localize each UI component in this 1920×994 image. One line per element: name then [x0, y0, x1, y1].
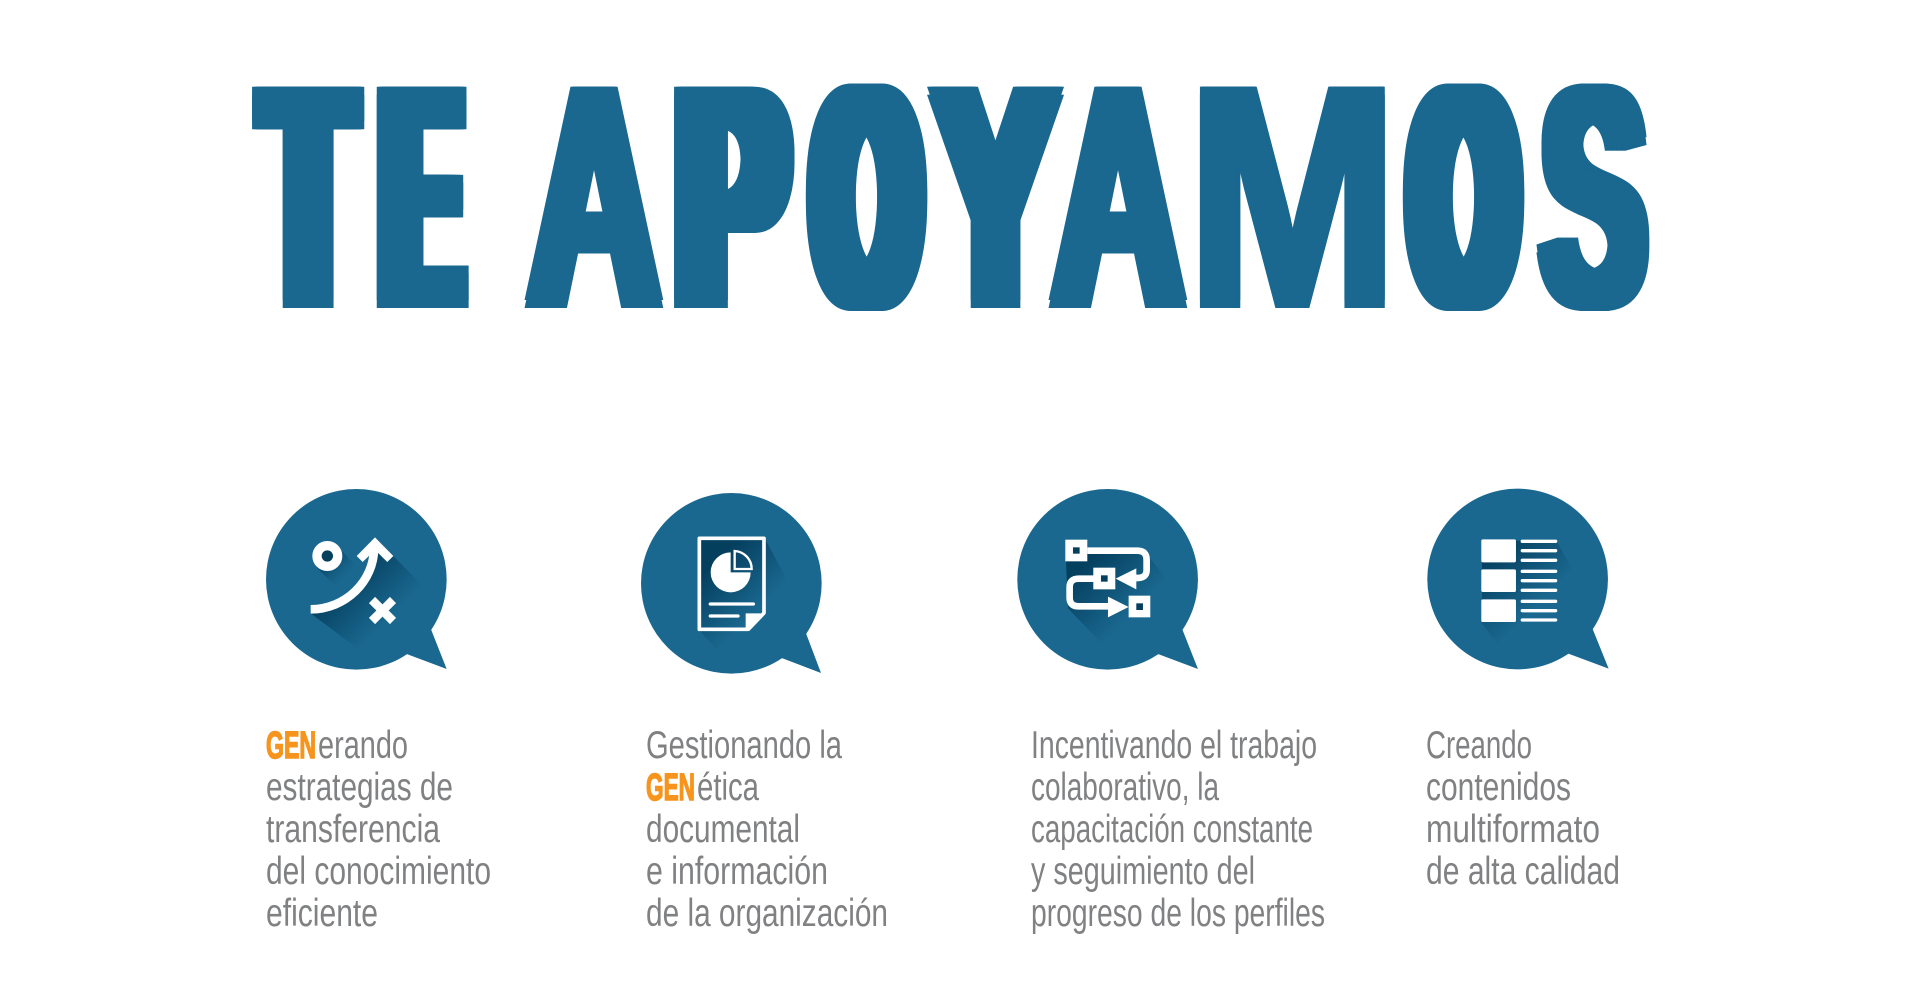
title: S [1542, 23, 1646, 370]
text block: gestionando: de la organización [646, 892, 888, 935]
text block: creando: de alta calidad [1426, 850, 1620, 893]
text block: creando: contenidos [1426, 766, 1571, 809]
icon: strategy speech bubble [266, 489, 447, 670]
text block: incentivando: y seguimiento del [1031, 850, 1255, 893]
title [252, 23, 1650, 370]
title: A [528, 23, 660, 370]
title: E [385, 23, 458, 370]
text block: generando: transferencia [266, 808, 440, 851]
text block: generando: del conocimiento [266, 850, 491, 893]
text block: generando: eficiente [266, 892, 378, 935]
text block: gestionando [646, 724, 888, 935]
text block: generando: estrategias de [266, 766, 453, 809]
title: Y [936, 23, 1055, 370]
icon: document speech bubble [641, 493, 822, 674]
text block: gestionando: ética [697, 766, 759, 809]
text block: gestionando: e información [646, 850, 828, 893]
title: O [1413, 23, 1514, 370]
text block: incentivando: progreso de los perfiles [1031, 892, 1325, 935]
text block: creando [1426, 724, 1620, 893]
text block: gestionando: Gestionando la [646, 724, 842, 767]
text block: generando: GEN [266, 725, 316, 767]
title: A [1052, 23, 1184, 370]
text block: incentivando [1031, 724, 1325, 935]
text block: gestionando: GEN [646, 767, 695, 809]
text block: generando [266, 724, 491, 935]
title: T [266, 23, 350, 370]
text block: generando: erando [318, 724, 408, 767]
text block: incentivando: colaborativo, la [1031, 766, 1219, 809]
text block: creando: multiformato [1426, 808, 1600, 851]
title: M [1187, 23, 1397, 370]
text block: gestionando: documental [646, 808, 800, 851]
icon: workflow speech bubble [1017, 489, 1198, 670]
text block: incentivando: capacitación constante [1031, 808, 1313, 851]
text block: incentivando: Incentivando el trabajo [1031, 724, 1317, 767]
text block: creando: Creando [1426, 724, 1532, 767]
icon: content list speech bubble [1427, 489, 1609, 669]
title: P [679, 23, 785, 370]
title: O [816, 23, 917, 370]
